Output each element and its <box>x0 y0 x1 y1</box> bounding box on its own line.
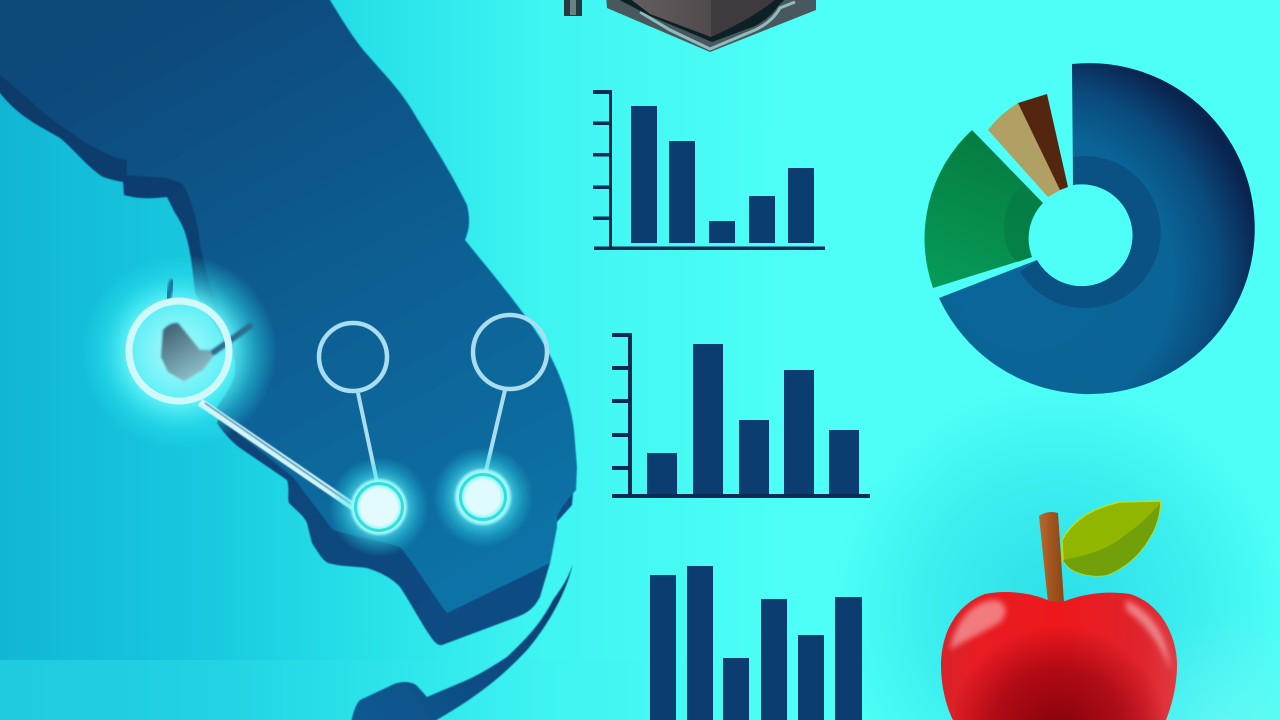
apple leaf shaded half <box>1063 503 1160 576</box>
marker: open ring middle <box>319 323 387 391</box>
map: Florida peninsula <box>0 0 577 720</box>
cap tassel <box>564 0 582 16</box>
apple stem <box>1039 512 1064 603</box>
donut slice: tan <box>988 103 1062 197</box>
icon: graduation cap <box>564 0 816 52</box>
marker: open ring right <box>473 315 547 389</box>
donut chart <box>925 63 1255 394</box>
map top face <box>0 0 577 613</box>
axis 2 <box>612 333 870 498</box>
donut slice: main blue <box>939 63 1255 394</box>
donut slice: brown <box>1018 94 1068 190</box>
bar chart 3 <box>650 566 862 720</box>
map side edge <box>0 0 575 645</box>
connector: middle ring to dot <box>358 393 377 482</box>
bar chart 1 <box>593 90 825 250</box>
icon: rock inside circle <box>161 323 218 381</box>
bar chart 2 <box>612 333 870 498</box>
connector: right ring to dot <box>485 390 505 475</box>
icon: apple <box>941 501 1177 720</box>
map detail: small inlet stick <box>168 282 172 298</box>
marker: large glowing circle <box>81 254 277 450</box>
apple leaf <box>1062 501 1161 576</box>
apple body <box>941 592 1177 720</box>
connector: large circle to dot <box>200 402 354 507</box>
marker: glowing dot middle <box>329 457 429 557</box>
donut slice: green <box>925 130 1043 288</box>
map detail: small inlet dash <box>214 326 250 352</box>
marker: glowing dot right <box>433 447 533 547</box>
apple bottom shadow <box>955 625 1165 720</box>
apple highlights <box>950 600 1005 650</box>
axis 1 <box>593 90 825 250</box>
donut green inner shade <box>1004 185 1043 262</box>
map island arc <box>350 563 573 720</box>
donut inner ring shade <box>1020 156 1161 308</box>
